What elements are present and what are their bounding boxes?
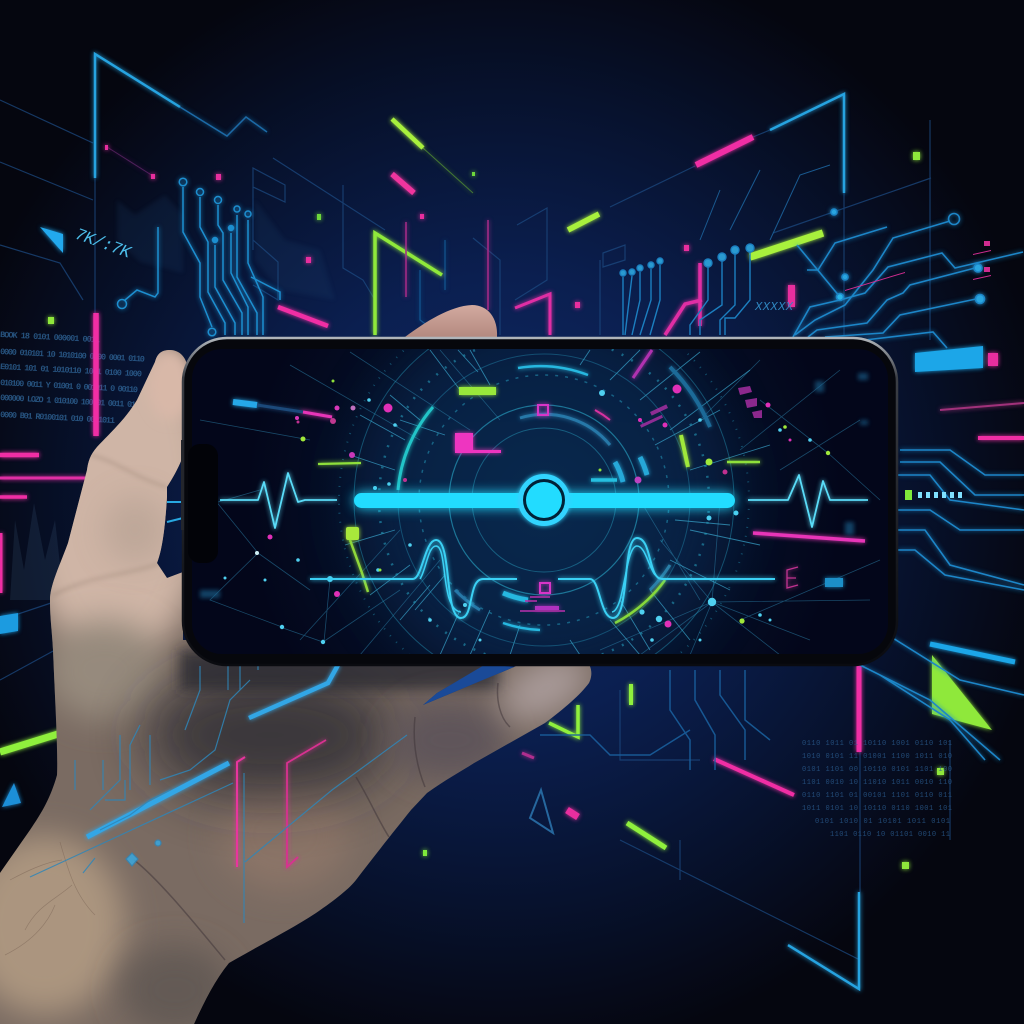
panel: right data text block: 1101 0110 10 01101 0010 11 (830, 831, 950, 839)
slider knob (520, 476, 568, 524)
scattered dots (224, 380, 830, 644)
long network lines (190, 350, 880, 655)
icon: small blue triangle (2, 783, 21, 807)
heartbeat left (220, 473, 337, 528)
heartbeat right (748, 475, 868, 527)
screen magenta cluster (520, 386, 762, 612)
radial burst lines (345, 350, 770, 655)
panel: left data text blocks: 0000 010101 10 1010100 0100 0001 0110 (0, 347, 145, 365)
panel: right circuit traces (793, 209, 1024, 760)
screen glow (344, 349, 744, 654)
thumb creases (53, 455, 167, 595)
hand (0, 315, 600, 1024)
thumb tip (148, 350, 192, 420)
palm dark centre (145, 670, 395, 800)
hand: top fingertip (405, 305, 497, 337)
glyph label: right code: XXXXX (754, 300, 794, 314)
concentric rings (338, 349, 750, 654)
phone (182, 336, 898, 666)
ring arcs (398, 366, 710, 630)
thin chart traces (406, 220, 488, 310)
lower palm tone (222, 794, 348, 890)
wrist shadow right (120, 945, 230, 1024)
panel: bits visible through thumb gap (167, 502, 183, 522)
panel: left data text blocks: 000000 LOZO 1 010100 100 01 0011 01 (0, 393, 136, 410)
panel: right magenta tags (845, 241, 991, 291)
lower waveform (310, 538, 775, 618)
circuit traces (118, 178, 280, 336)
panel: left data text blocks: E0101 101 01 1010110 1001 0100 1000 (0, 362, 142, 379)
panel: right data text block: 0110 1101 01 00101 1101 0110 011 (802, 792, 952, 800)
panel: left data text blocks: 0000 B01 R0100101 010 0001011 (0, 410, 115, 426)
wrist tone (0, 835, 125, 1015)
slider bar (354, 493, 735, 508)
notch (188, 444, 218, 563)
phone body (183, 338, 897, 665)
fingertip tone (486, 666, 592, 735)
panel: lower right frame (788, 892, 859, 989)
screen (192, 349, 888, 654)
panel: lower centre circuit traces (530, 670, 770, 833)
panel: faint ghost charts (10, 195, 335, 600)
panel: upper right neon frame (770, 94, 844, 193)
panel: left data text blocks (0, 330, 145, 426)
icon: blue triangle with glyphs (40, 226, 134, 264)
wrist veins (5, 842, 95, 955)
panel: right small pixels (905, 490, 962, 500)
panel: right data text block: 0101 1101 00 10110 0101 1101 100 (802, 766, 952, 774)
finger base tone (390, 700, 510, 780)
upper palm tone (45, 620, 165, 720)
corner bracket (95, 54, 180, 178)
shadow under phone (180, 650, 500, 690)
panel: neon bars (0, 119, 1024, 869)
panel: faint wireframe planes (0, 100, 950, 960)
panel: left data text blocks: BOOK 18 0101 000001 0011 (0, 330, 100, 345)
panel: right data text block: 0110 1011 01 10110 1001 0110 101 (802, 740, 952, 748)
phone side button (181, 440, 184, 530)
screen blurred tiles (200, 373, 868, 598)
thumb tone (50, 350, 186, 660)
thumb shade (104, 498, 165, 562)
panel: upper centre circuit traces (620, 165, 830, 335)
panel: left data text blocks: 010100 0011 Y 01001 0 001011 0 00110 (0, 378, 138, 395)
panel: right data text block (802, 740, 952, 839)
panel: right data text block: 1010 0101 11 01001 1100 1011 010 (802, 753, 952, 761)
panel: right data text block: 1101 0010 10 11010 1011 0010 110 (802, 779, 952, 787)
palm creases (134, 683, 510, 960)
glyph label: 7K/:7K (72, 226, 134, 264)
overlay: holographic lines across hand (30, 665, 407, 923)
screen neon marks (233, 350, 865, 610)
blue strip behind finger (423, 664, 514, 705)
panel: right data text block: 0101 1010 01 10101 1011 0101 (815, 818, 950, 826)
panel: upper left neon frame and circuit traces (95, 54, 488, 336)
green angle (375, 233, 442, 335)
panel: right data text block: 1011 0101 10 10110 0110 1001 101 (802, 805, 952, 813)
